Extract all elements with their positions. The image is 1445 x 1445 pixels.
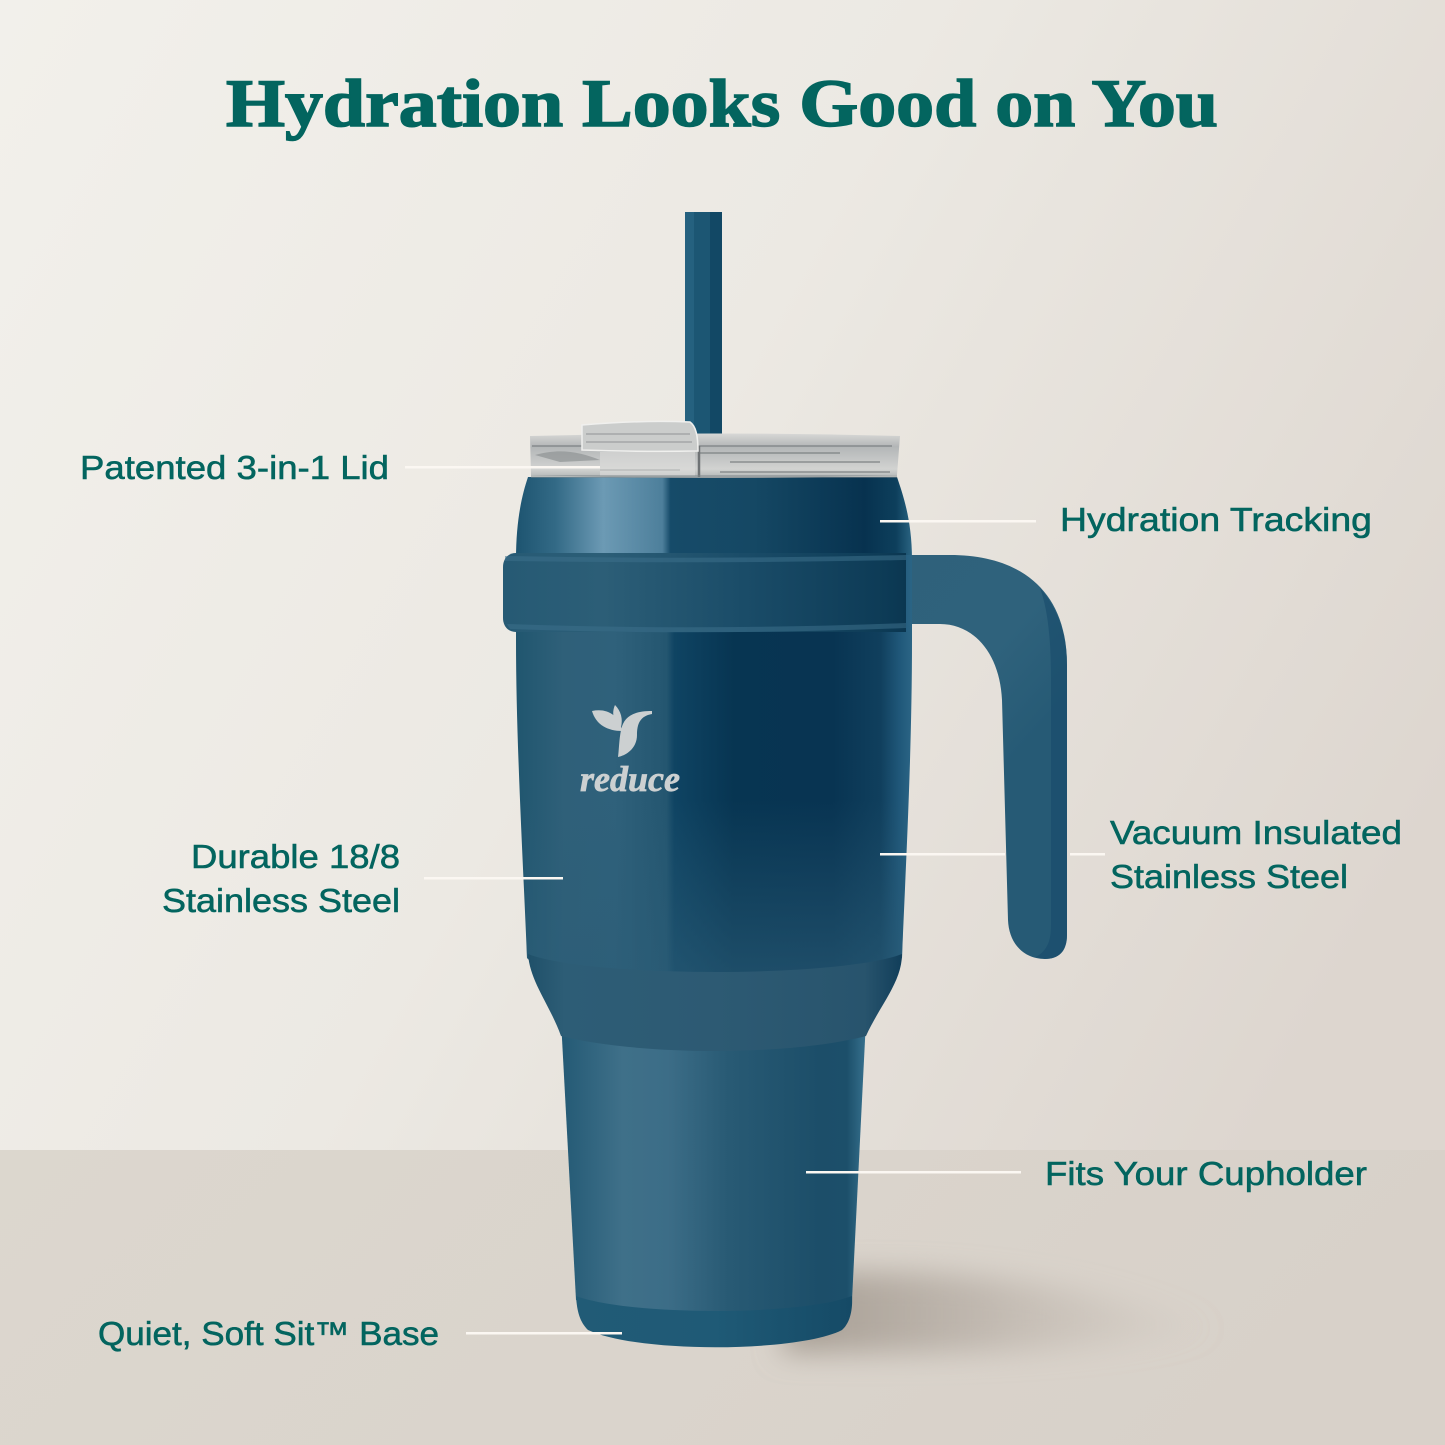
floor surface xyxy=(0,1150,1445,1445)
callout: fits cupholder: Fits Your Cupholder xyxy=(1045,1155,1367,1192)
main body section xyxy=(516,555,912,980)
callout: durable stainless steel: Stainless Steel xyxy=(162,882,400,919)
upper body section xyxy=(516,477,912,560)
soft base xyxy=(576,1296,852,1347)
main body lower fade xyxy=(523,800,907,980)
illustration: blue tumbler xyxy=(503,212,1067,1347)
callout: vacuum insulated xyxy=(880,814,1402,895)
callout: durable stainless steel: Durable 18/8 xyxy=(191,838,400,875)
callout: patented lid: Patented 3-in-1 Lid xyxy=(80,449,389,486)
logo: reduce: reduce xyxy=(580,759,680,799)
callout: soft sit base: Quiet, Soft Sit™ Base xyxy=(98,1315,439,1352)
callout: durable stainless steel xyxy=(162,838,563,919)
title: Hydration Looks Good on You xyxy=(226,65,1218,141)
lower body xyxy=(561,1020,866,1316)
logo: reduce xyxy=(580,705,680,799)
callout: hydration tracking: Hydration Tracking xyxy=(1060,501,1372,538)
straw xyxy=(685,212,722,436)
clear lid xyxy=(530,421,900,478)
silicone collar xyxy=(503,553,906,632)
handle xyxy=(895,555,1067,959)
callout: vacuum insulated: Vacuum Insulated xyxy=(1110,814,1402,851)
callout: vacuum insulated: Stainless Steel xyxy=(1110,858,1348,895)
tapered shoulder xyxy=(528,954,902,1051)
collar highlight xyxy=(505,555,906,632)
tumbler shadow xyxy=(780,1272,1220,1353)
handle outer side shading xyxy=(1036,588,1067,959)
